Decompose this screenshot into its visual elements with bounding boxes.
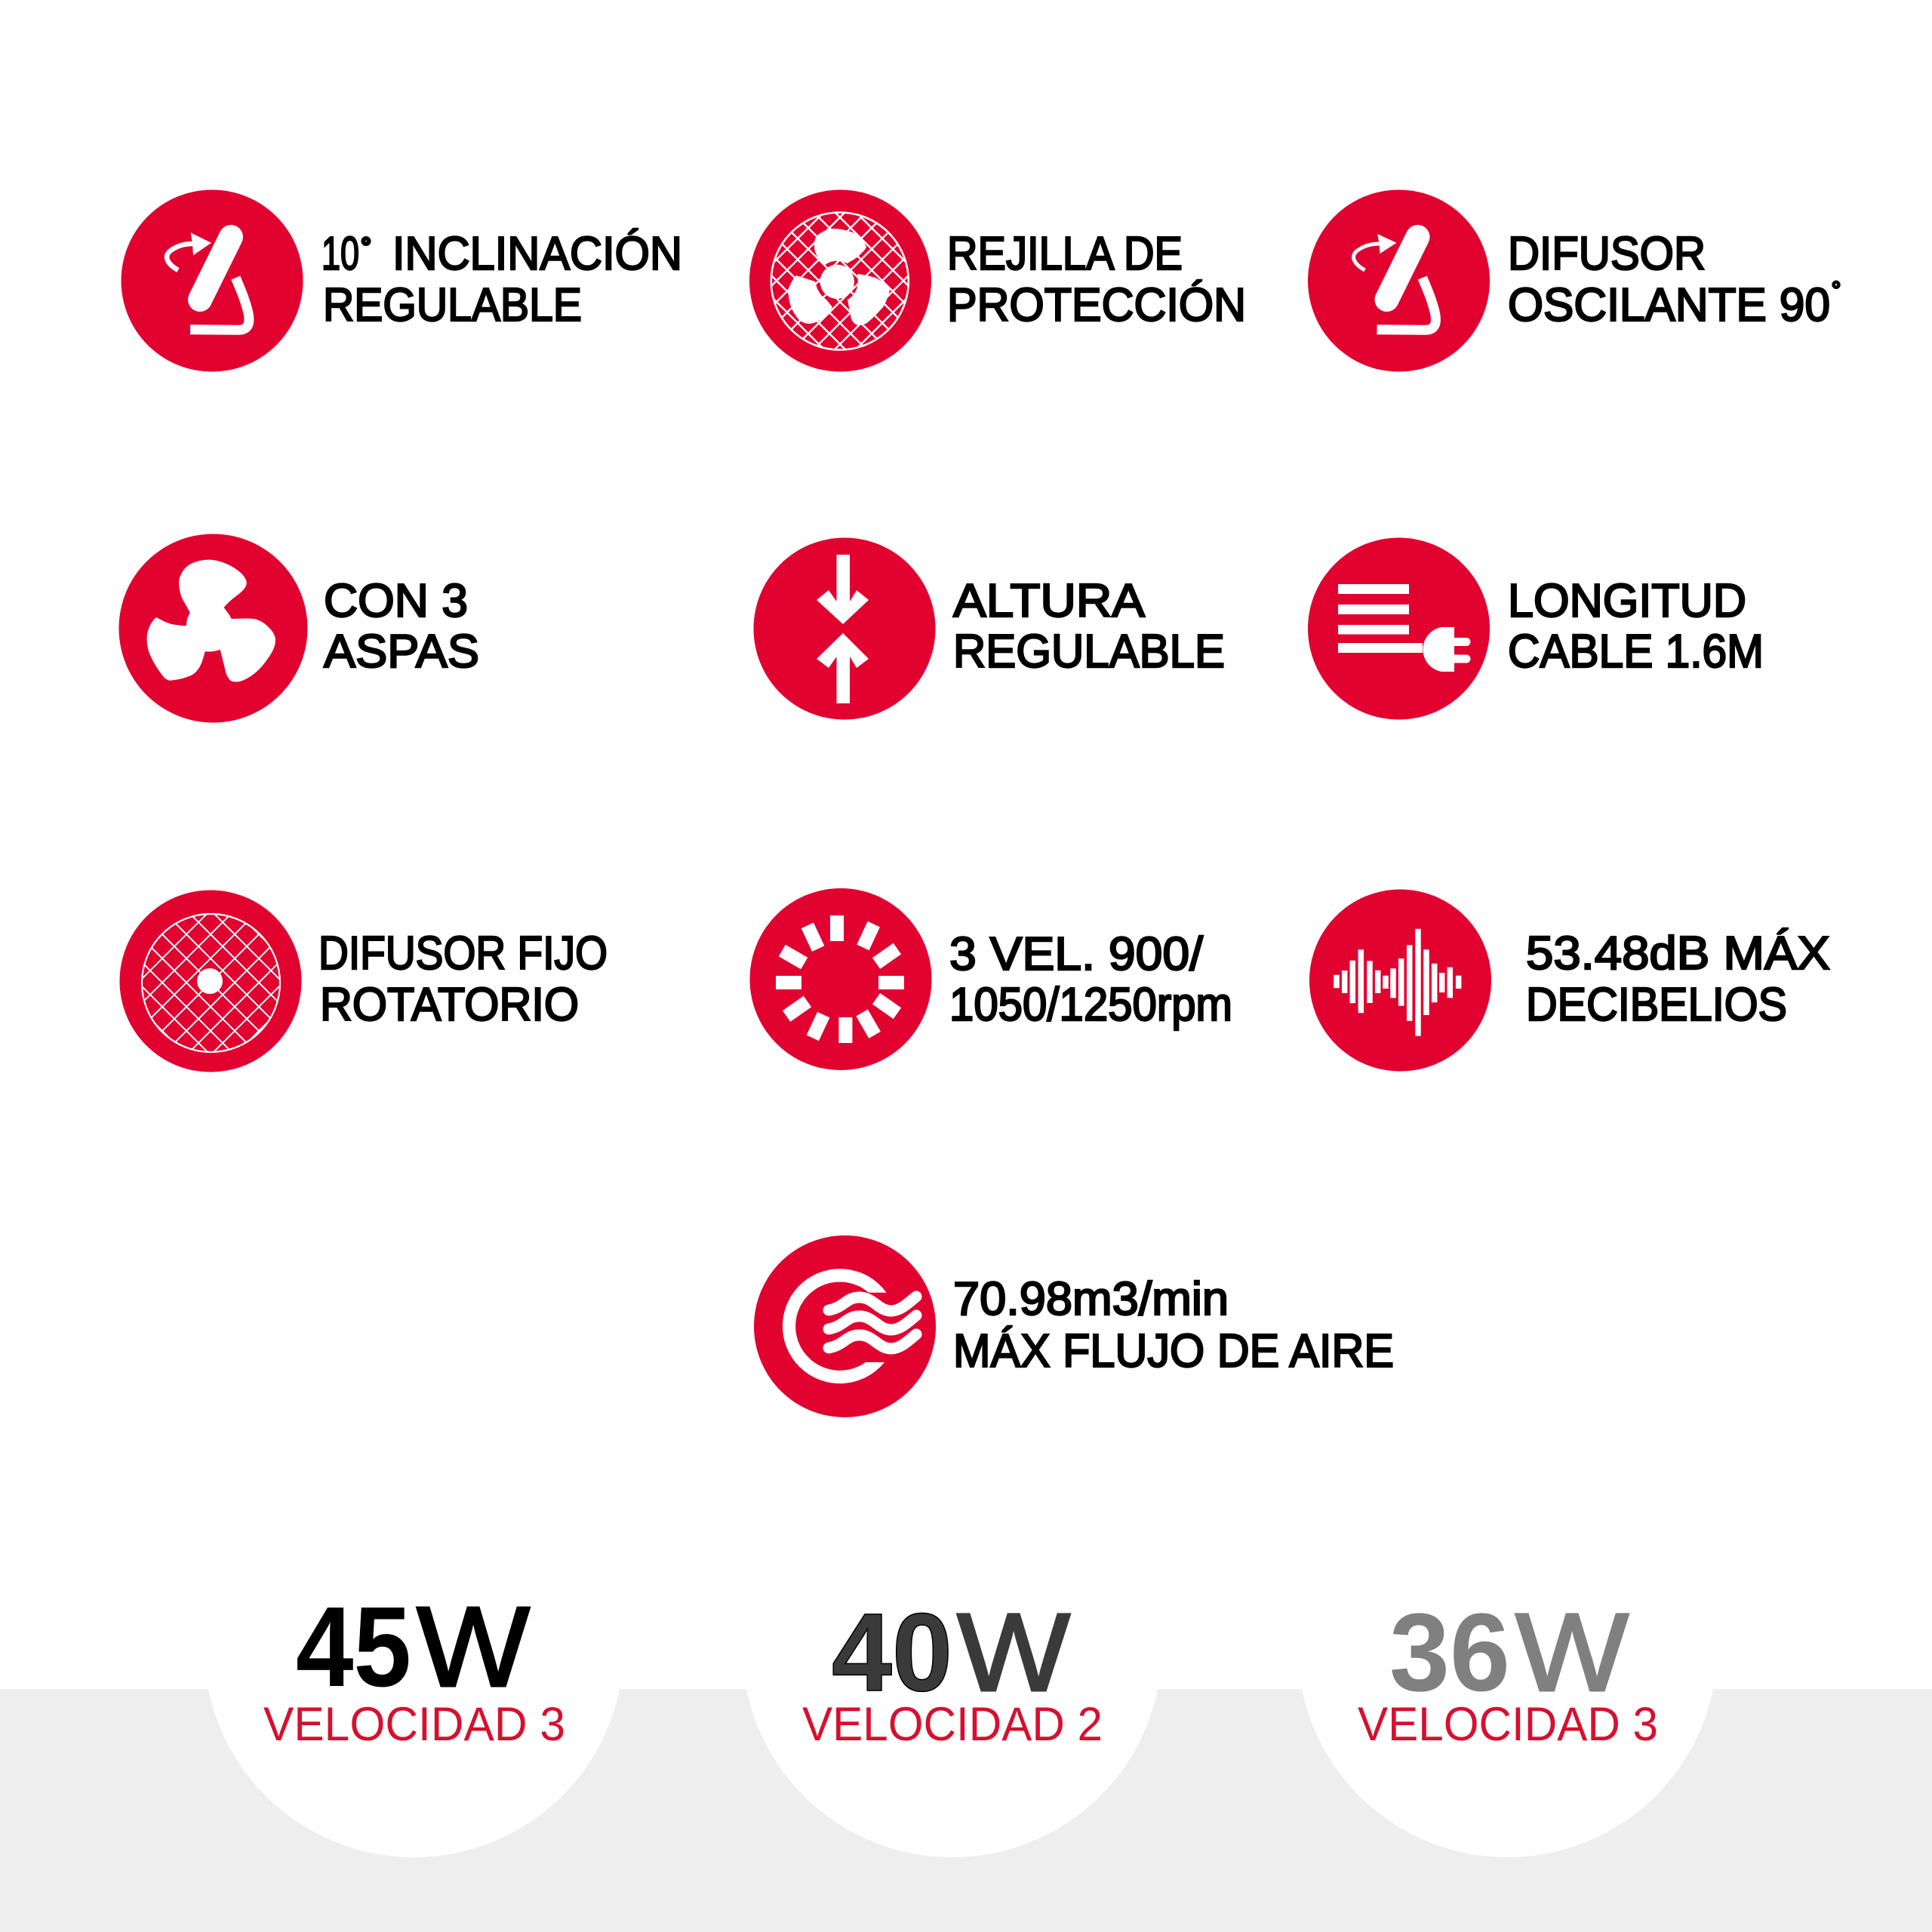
text: 70.98m3/min máx flujo de aire: 70.98m3/min [953, 1273, 1229, 1325]
text: 3 vel. rpm: 1050/1250rpm [949, 979, 1232, 1031]
stat: 40W velocidad 2 [802, 1591, 1103, 1751]
text: 3 vel. rpm: 3 VEL. 900/ [949, 928, 1204, 980]
panel: feature difusor fijo rotatorio [119, 891, 608, 1072]
panel: feature rejilla de protección [749, 190, 1246, 371]
stat: 45W velocidad 3: W [417, 1583, 530, 1710]
icon: height arrows [753, 537, 936, 720]
text: longitud cable 1.6M [1508, 575, 1764, 678]
icon: three blade fan [119, 534, 308, 723]
panel: feature flujo de aire [754, 1235, 1394, 1417]
panel: feature difusor oscilante 90° [1308, 190, 1841, 371]
panel: feature con 3 aspas [119, 534, 479, 723]
text: altura regulable: REGULABLE [953, 626, 1225, 678]
panel: feature 10° inclinación regulable [121, 190, 682, 371]
text: difusor oscilante 90° [1508, 228, 1841, 331]
stat: 45W velocidad 3 [263, 1583, 565, 1751]
text: 10° inclinación regulable: REGULABLE [323, 279, 582, 331]
stat: 40W velocidad 2: 40 [832, 1591, 952, 1715]
text: rejilla de protección: REJILLA DE [947, 228, 1183, 280]
panel: feature longitud cable [1308, 537, 1764, 720]
text: 70.98m3/min máx flujo de aire [953, 1273, 1394, 1377]
icon: fixed diffuser grille [119, 891, 302, 1072]
text: 53.48dB máx decibelios: DECIBELIOS [1526, 979, 1787, 1031]
stat: 36W velocidad 3 [1358, 1591, 1658, 1751]
text: 10° inclinación regulable [321, 228, 682, 331]
text: 53.48dB máx decibelios [1526, 928, 1830, 1031]
text: con 3 aspas [324, 575, 479, 678]
text: longitud cable 1.6M: LONGITUD [1508, 575, 1746, 627]
stat: 45W velocidad 3: VELOCIDAD 3 [263, 1698, 565, 1751]
stat: 36W velocidad 3: VELOCIDAD 3 [1358, 1698, 1658, 1751]
text: difusor oscilante 90°: DIFUSOR [1508, 228, 1706, 280]
icon: speed ring [750, 888, 931, 1070]
icon: oscillating diffuser [1308, 190, 1490, 371]
text: 10° inclinación regulable: ° [361, 232, 371, 260]
text: 53.48dB máx decibelios: 53.48dB MÁX [1526, 928, 1830, 980]
stat: 36W velocidad 3: 36 [1389, 1591, 1510, 1715]
icon: airflow [754, 1235, 936, 1417]
panel: bottom power band [0, 1438, 1932, 1932]
text: difusor fijo rotatorio [318, 928, 608, 1031]
text: con 3 aspas: ASPAS [324, 626, 479, 678]
text: rejilla de protección [947, 228, 1246, 331]
stat: 40W velocidad 2: W [957, 1591, 1070, 1715]
text: difusor oscilante 90°: ° [1832, 278, 1841, 303]
text: longitud cable 1.6M: CABLE 1.6M [1508, 626, 1764, 678]
stat: 45W velocidad 3: 45 [296, 1583, 411, 1710]
text: difusor fijo rotatorio: DIFUSOR FIJO [318, 928, 608, 980]
text: con 3 aspas: CON 3 [324, 575, 468, 627]
panel: feature altura regulable [753, 537, 1225, 720]
icon: fan with protection grille [749, 190, 931, 371]
text: 70.98m3/min máx flujo de aire: MÁX FLUJO DE AIRE [953, 1325, 1394, 1377]
icon: tilt adjustment [121, 190, 303, 371]
text: altura regulable [953, 575, 1225, 678]
stat: 40W velocidad 2: VELOCIDAD 2 [802, 1698, 1103, 1751]
stat: 36W velocidad 3: W [1515, 1591, 1629, 1715]
text: 10° inclinación regulable: INCLINACIÓN [392, 228, 682, 280]
panel: feature decibelios [1309, 889, 1830, 1072]
text: 10° inclinación regulable: 10 [321, 228, 359, 280]
icon: sound wave [1309, 889, 1491, 1072]
text: difusor fijo rotatorio: ROTATORIO [320, 979, 579, 1031]
panel: feature 3 velocidades [750, 888, 1232, 1070]
text: difusor oscilante 90°: OSCILANTE 90 [1508, 279, 1830, 331]
text: altura regulable: ALTURA [953, 575, 1146, 627]
text: 3 vel. rpm [949, 928, 1232, 1031]
text: rejilla de protección: PROTECCIÓN [947, 279, 1246, 331]
icon: cable with plug [1308, 537, 1490, 720]
